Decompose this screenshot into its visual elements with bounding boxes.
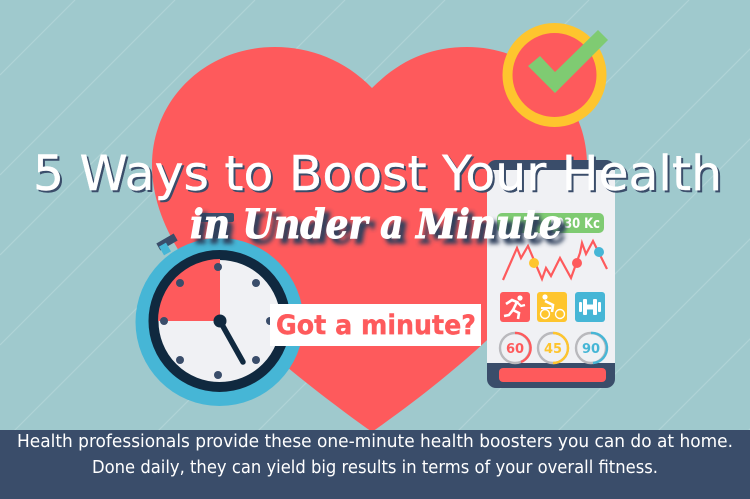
heart — [152, 47, 587, 432]
calorie pill: 1030 Kc — [548, 216, 600, 232]
title: 5 Ways to Boost Your Health — [35, 148, 724, 204]
banner: intro text — [0, 430, 750, 499]
subtitle: in Under a Minute — [195, 206, 567, 253]
gauge: 90: 90 — [582, 342, 600, 357]
title: 5 Ways to Boost Your Health — [33, 146, 722, 202]
icon: runner — [500, 292, 530, 322]
icon: stopwatch — [136, 213, 304, 406]
panel: fitness phone — [487, 160, 615, 388]
banner: intro text: Done daily, they can yield big results in terms of your overall fitness. — [92, 458, 658, 478]
banner: intro text: Health professionals provide these one-minute health boosters you can do at home. — [17, 432, 733, 452]
callout: got a minute: Got a minute? — [276, 310, 476, 341]
subtitle: in Under a Minute — [190, 201, 562, 248]
line chart — [503, 241, 607, 280]
callout: got a minute — [270, 304, 481, 346]
icon: dumbbell — [575, 292, 605, 322]
icon: cyclist — [537, 292, 567, 322]
calorie pill — [497, 213, 604, 233]
gauge: 60: 60 — [506, 342, 524, 357]
gauge: 45 — [538, 333, 568, 363]
gauge: 60 — [500, 333, 531, 363]
gauge: 90 — [576, 333, 607, 363]
gauge: 45: 45 — [544, 342, 562, 357]
icon: check mark badge — [508, 28, 608, 122]
progress bar — [499, 368, 606, 382]
